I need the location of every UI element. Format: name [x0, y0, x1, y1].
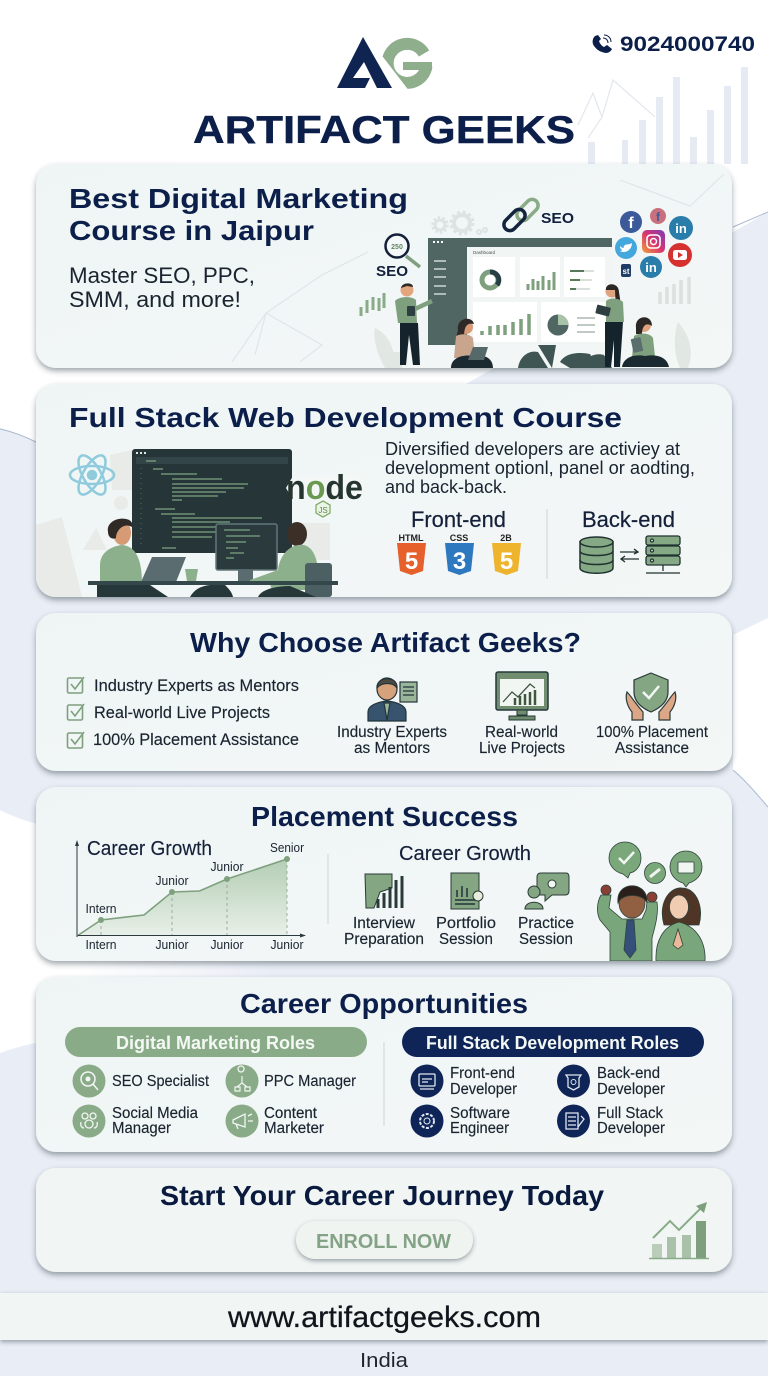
social media icons: in [675, 221, 687, 236]
title: Artifact Geeks: ARTIFACT GEEKS [193, 109, 575, 152]
heading: Why Choose Artifact Geeks? [190, 627, 581, 658]
career growth column: Career Growth [399, 843, 531, 865]
icon: portfolio session: Portfolio [436, 915, 496, 932]
role: back-end developer [557, 1064, 665, 1098]
line chart: career growth [75, 838, 306, 952]
icon: interview preparation: Preparation [344, 931, 424, 948]
subheading: SMM, and more! [69, 287, 241, 312]
feature: mentors: Industry Experts [337, 724, 447, 741]
decorative small charts [361, 277, 689, 316]
icon: SEO magnifier: 250 [391, 244, 403, 251]
front-end: Front-end [411, 507, 506, 532]
chairs [518, 345, 612, 368]
heading: Start Your Career Journey Today [160, 1180, 604, 1211]
icon: mentor [368, 678, 417, 721]
icon: monitor chart [496, 672, 548, 720]
checklist: Real-world Live Projects [94, 703, 270, 722]
role: software engineer: Engineer [450, 1120, 509, 1137]
background chart decoration [578, 67, 748, 164]
heading: Placement Success [251, 801, 518, 832]
social media icons: in [645, 260, 657, 275]
illustration: developers at monitor [88, 449, 338, 597]
illustration: celebrating graduates [597, 842, 705, 961]
role: back-end developer: Developer [597, 1081, 665, 1098]
role: front-end developer: Front-end [450, 1065, 515, 1082]
man [597, 885, 657, 961]
role: full stack developer [557, 1104, 665, 1138]
button: enroll now [296, 1221, 473, 1259]
panel: placement success [36, 787, 732, 961]
checklist: Industry Experts as Mentors [94, 676, 299, 695]
full stack development roles: Full Stack Development Roles [426, 1033, 679, 1053]
description: Diversified developers are activiey at [385, 438, 680, 459]
woman sitting right [622, 317, 669, 367]
role: content marketer: Marketer [264, 1120, 324, 1137]
role: front-end developer [410, 1064, 517, 1098]
line chart: career growth: Junior [270, 937, 304, 952]
icon: shield in hands [626, 673, 676, 720]
woman standing [595, 284, 624, 367]
icon: CSS shield: 3 [453, 548, 466, 575]
role: content marketer: Content [264, 1105, 318, 1122]
feature: mentors: as Mentors [354, 740, 430, 757]
icon: gears [432, 212, 487, 234]
footer: country: India [360, 1350, 409, 1372]
digital marketing roles: Digital Marketing Roles [116, 1033, 315, 1053]
description [385, 438, 695, 497]
icon: interview preparation: Interview [353, 915, 416, 932]
monitor with code [132, 449, 292, 553]
woman [656, 888, 705, 961]
icon: HTML shield: HTML [398, 533, 424, 543]
role: full stack developer: Developer [597, 1120, 665, 1137]
phone number: 9024000740 [620, 33, 755, 56]
role: social media manager: Manager [112, 1120, 171, 1137]
faint background shapes [36, 450, 330, 597]
icon: practice session: Practice [518, 915, 574, 932]
speech bubbles [609, 842, 702, 887]
icon: SEO magnifier: SEO [376, 263, 408, 280]
woman sitting left [451, 319, 493, 368]
icon: CSS shield: CSS [450, 533, 468, 543]
description: development optionl, panel or aodting, [385, 457, 695, 478]
icon: database [580, 537, 613, 573]
feature: placement [596, 673, 709, 757]
footer: website bar [0, 1293, 768, 1340]
panel: digital marketing course [36, 164, 732, 368]
icon: HTML shield [397, 533, 426, 575]
checklist [68, 676, 299, 749]
panel: full stack web development [36, 384, 732, 597]
illustration: team members [374, 283, 691, 368]
career growth column [344, 843, 574, 948]
panel: why choose [36, 613, 732, 771]
role: PPC manager [226, 1064, 356, 1098]
panel: call to action [36, 1168, 732, 1272]
line chart: career growth: Intern [86, 937, 116, 952]
icon: portfolio session [436, 873, 496, 948]
icon: link SEO: SEO [541, 210, 574, 227]
laptop [141, 557, 186, 582]
logo: AG mark [337, 37, 432, 92]
social media icons: f [656, 210, 661, 224]
full stack development roles [402, 1027, 704, 1138]
role: software engineer [410, 1104, 510, 1138]
icon: SEO magnifier [376, 234, 420, 280]
desk legs and chairs [97, 585, 316, 597]
icon: portfolio session: Session [439, 931, 493, 948]
small monitor [216, 524, 277, 582]
right developer [250, 522, 318, 590]
icon: phone [593, 35, 612, 53]
heading: Best Digital Marketing [69, 183, 408, 214]
cup [185, 569, 198, 581]
icon: JS shield: 2B [500, 533, 512, 543]
panel: career opportunities [36, 977, 732, 1152]
icon: interview preparation [344, 874, 424, 948]
heading [69, 183, 408, 246]
feature: projects: Real-world [485, 724, 558, 741]
line chart: career growth: Junior [156, 937, 189, 952]
line chart: career growth: Junior [210, 859, 244, 874]
icon: JS shield: 5 [500, 548, 513, 575]
plants [374, 322, 691, 368]
feature: placement: Assistance [615, 740, 689, 757]
icon: HTML shield: 5 [405, 548, 418, 575]
role: PPC manager: PPC Manager [264, 1073, 356, 1090]
footer: website bar: www.artifactgeeks.com [227, 1301, 541, 1334]
icon: JS shield [492, 533, 521, 575]
desk [88, 581, 338, 585]
role: full stack developer: Full Stack [597, 1105, 663, 1122]
icon: CSS shield [445, 533, 474, 575]
social media icons [615, 208, 693, 278]
back-end [580, 507, 680, 573]
front-end [397, 507, 521, 575]
subheading: Master SEO, PPC, [69, 263, 255, 288]
role: software engineer: Software [450, 1105, 510, 1122]
man standing [395, 283, 432, 365]
dashboard illustration: Dashboard [473, 250, 496, 255]
feature: projects [479, 672, 565, 757]
role: SEO specialist [72, 1064, 210, 1098]
checklist: 100% Placement Assistance [93, 730, 299, 749]
feature: projects: Live Projects [479, 740, 565, 757]
social media icons: st [622, 267, 630, 276]
icon: practice session [518, 873, 574, 948]
line chart: career growth: Junior [156, 873, 189, 888]
chair [305, 563, 332, 597]
heading: Course in Jaipur [69, 215, 314, 246]
description: and back-back. [385, 476, 507, 497]
icon: arrows [620, 549, 639, 562]
icon: node.js: node [286, 469, 363, 507]
dashboard illustration [428, 238, 612, 345]
line chart: career growth: Intern [86, 901, 116, 916]
icon: practice session: Session [519, 931, 573, 948]
line chart: career growth: Junior [210, 937, 244, 952]
role: social media manager: Social Media [112, 1105, 198, 1122]
left developer [100, 519, 142, 584]
digital marketing roles [65, 1027, 367, 1138]
role: SEO specialist: SEO Specialist [112, 1073, 210, 1090]
line chart: career growth: Career Growth [87, 838, 212, 860]
back-end: Back-end [582, 507, 675, 532]
social media icons: f [628, 215, 634, 232]
icon: node.js: JS [318, 506, 328, 515]
icon: react [70, 451, 114, 499]
role: front-end developer: Developer [450, 1081, 517, 1098]
icon: server [646, 536, 680, 573]
heading: Career Opportunities [240, 988, 528, 1019]
feature: placement: 100% Placement [596, 724, 709, 741]
subheading [69, 263, 255, 312]
role: social media manager [72, 1104, 198, 1138]
heading: Full Stack Web Development Course [69, 402, 622, 433]
role: back-end developer: Back-end [597, 1065, 660, 1082]
icon: link SEO [501, 197, 574, 233]
feature: mentors [337, 678, 447, 757]
role: content marketer [226, 1104, 324, 1138]
button: enroll now: ENROLL NOW [316, 1231, 451, 1253]
icon: growth chart [649, 1202, 709, 1258]
line chart: career growth: Senior [270, 840, 305, 855]
